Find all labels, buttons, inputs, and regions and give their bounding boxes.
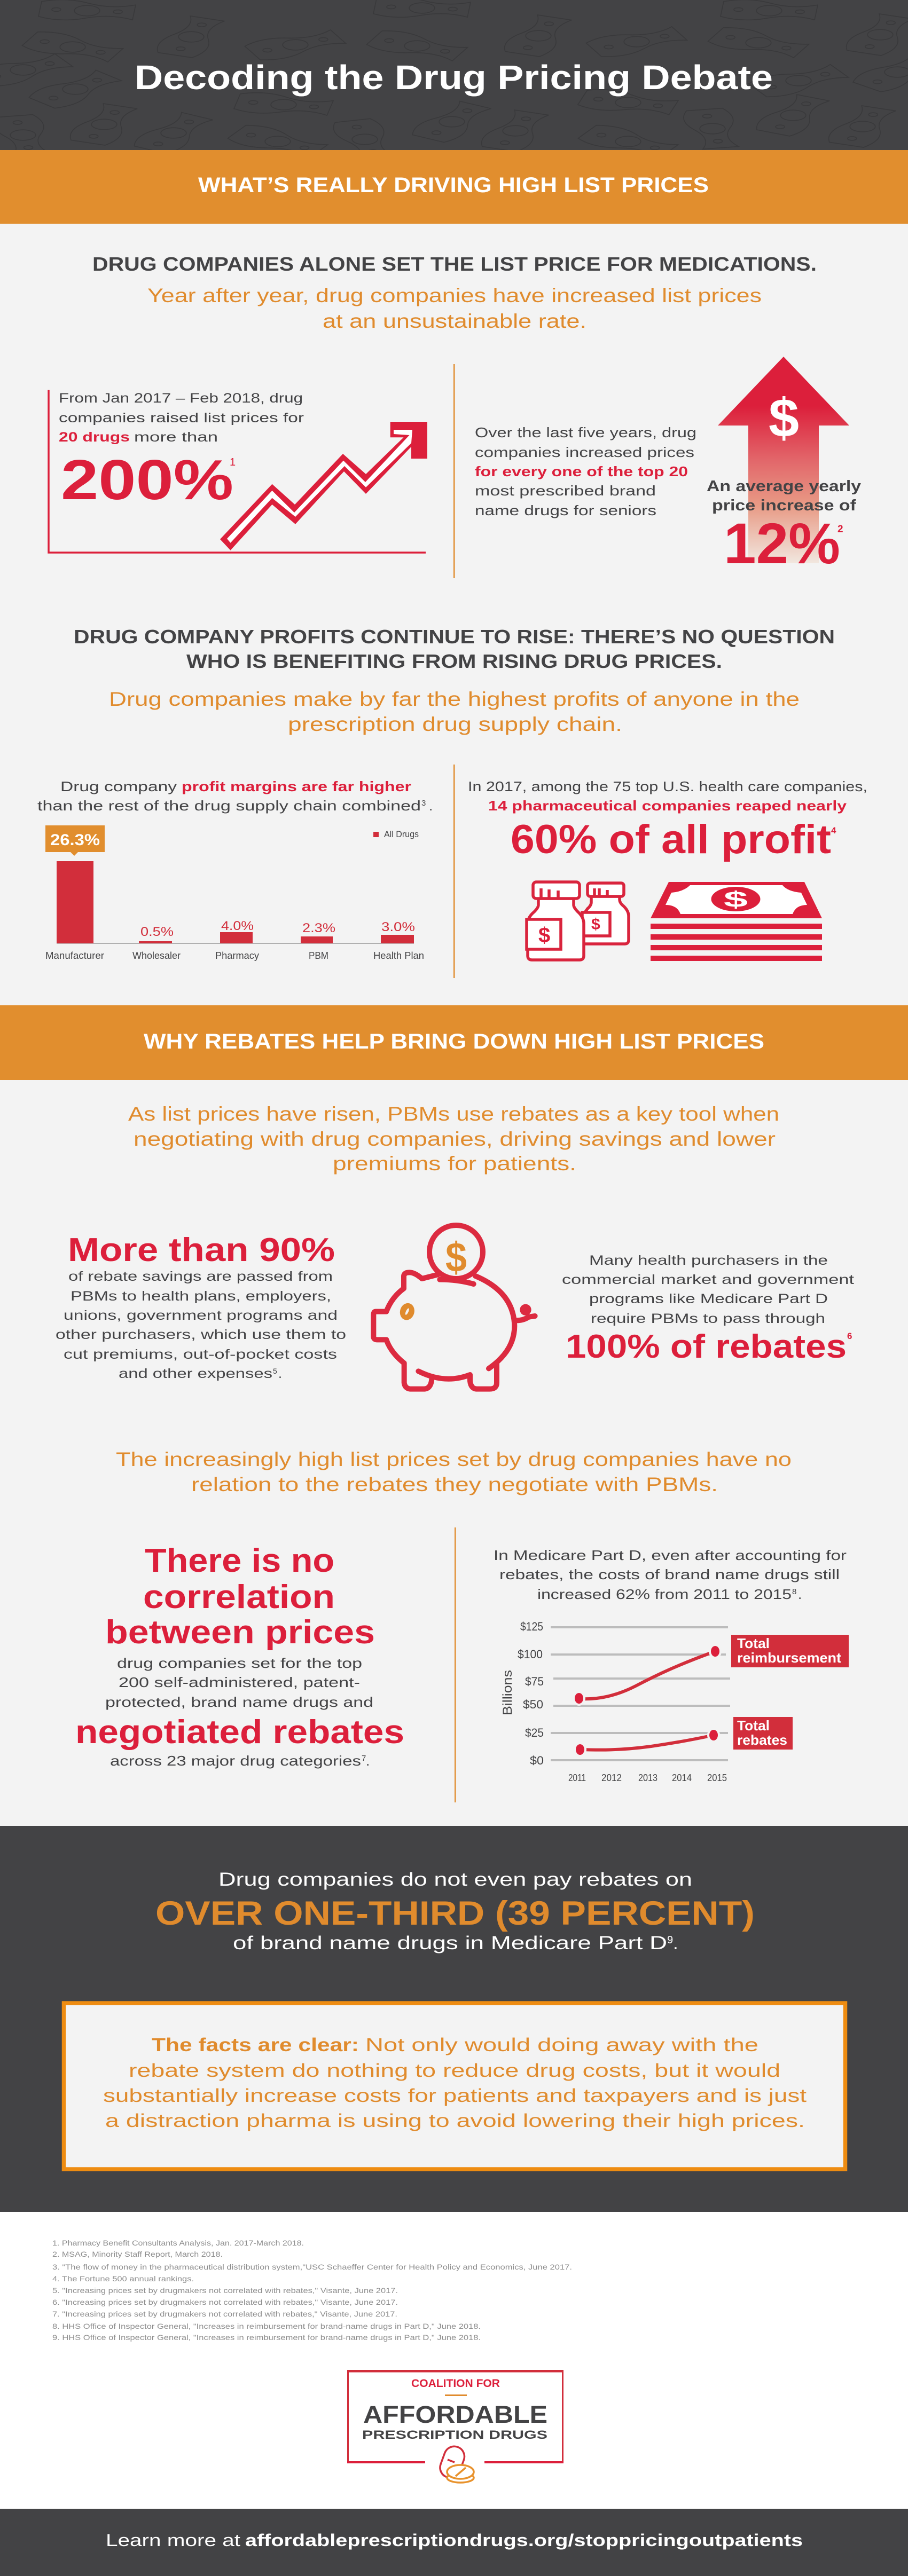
icon: pill bottles: $ <box>591 916 600 933</box>
text: learn more: affordableprescriptiondrugs.org/stoppricingoutpatients <box>245 2531 803 2550</box>
title: Decoding the Drug Pricing Debate <box>135 58 773 97</box>
bar: health plan: 3.0% <box>381 920 415 934</box>
line chart: reimbursement and rebates <box>500 1620 849 1783</box>
label: total rebates <box>733 1717 793 1750</box>
bar: PBM: PBM <box>309 950 328 961</box>
x axis labels: 2015 <box>707 1773 727 1783</box>
text block: no correlation: protected, brand name drugs and <box>105 1694 373 1710</box>
bar: health plan: Health Plan <box>373 950 424 961</box>
subheading: year after year: at an unsustainable rate. <box>323 310 586 332</box>
stat: more than 90 percent: unions, government programs and <box>64 1308 338 1323</box>
divider line <box>453 765 455 978</box>
subheading: year after year <box>147 285 762 332</box>
icon: pill bottles: $ <box>538 924 550 947</box>
stat: more than 90 percent: of rebate savings are passed from <box>68 1269 333 1284</box>
stat: 100 percent of rebates: 6 <box>847 1331 852 1341</box>
callout: the facts are clear: rebate system do nothing to reduce drug costs, but it would <box>129 2060 780 2081</box>
bar: manufacturer: Manufacturer <box>45 950 104 961</box>
x axis labels: 2011 <box>568 1773 586 1783</box>
divider line <box>453 364 455 578</box>
bar: pharmacy <box>215 919 259 961</box>
panel: header <box>0 0 908 161</box>
footnotes: 5. "Increasing prices set by drugmakers not correlated with rebates," Visante, June 2017. <box>52 2286 398 2295</box>
subheading: rebates as key tool: As list prices have risen, PBMs use rebates as a key tool when <box>128 1103 779 1125</box>
text block: no correlation: across 23 major drug categories <box>110 1753 361 1769</box>
label: total rebates: rebates <box>737 1732 787 1748</box>
stat: more than 90 percent: and other expenses <box>119 1366 272 1381</box>
icon: piggy bank with coin: $ <box>445 1234 467 1281</box>
heading: what's really driving high list prices: WHAT’S REALLY DRIVING HIGH LIST PRICES <box>198 174 709 197</box>
text: medicare part D <box>494 1547 847 1602</box>
text: medicare part D: increased 62% from 2011 to 2015 <box>537 1586 792 1602</box>
y axis labels: $0 <box>530 1754 544 1767</box>
panel: section banner 2 <box>0 1005 908 1080</box>
x axis labels: 2013 <box>638 1773 657 1783</box>
callout: the facts are clear <box>64 2003 845 2169</box>
text: profit margins: profit margins are far higher <box>182 778 411 794</box>
stat: more than 90 percent: . <box>278 1366 282 1381</box>
x axis labels <box>568 1773 727 1783</box>
text: medicare part D: rebates, the costs of brand name drugs still <box>499 1566 840 1582</box>
footnotes: 2. MSAG, Minority Staff Report, March 2018. <box>52 2250 223 2258</box>
bar: wholesaler: 0.5% <box>140 925 174 939</box>
heading: drug company profits <box>74 626 835 672</box>
bar: wholesaler <box>132 925 181 961</box>
text: 20 drugs more than: 20 drugs <box>59 430 130 445</box>
heading: drug company profits: DRUG COMPANY PROFITS CONTINUE TO RISE: THERE’S NO QUESTION <box>74 626 835 648</box>
text: top 20 brand name drugs: for every one of the top 20 <box>475 463 688 479</box>
text: over one-third: 9 <box>667 1934 673 1946</box>
text: 14 pharmaceutical companies: In 2017, among the 75 top U.S. health care companies, <box>468 778 867 794</box>
text: top 20 brand name drugs <box>475 424 696 518</box>
text block: no correlation: There is no <box>145 1542 334 1579</box>
label: total rebates: Total <box>737 1718 770 1734</box>
y axis labels: $100 <box>518 1648 543 1661</box>
footnotes: 1. Pharmacy Benefit Consultants Analysis, Jan. 2017-March 2018. <box>52 2239 304 2247</box>
text: over one-third: Drug companies do not even pay rebates on <box>218 1869 692 1890</box>
y axis labels: Billions <box>500 1670 515 1715</box>
text block: no correlation: 200 self-administered, patent- <box>119 1674 360 1690</box>
subheading: no relation: relation to the rebates they negotiate with PBMs. <box>191 1474 718 1495</box>
text block: no correlation: . <box>366 1753 370 1769</box>
footnotes: 9. HHS Office of Inspector General, "Increases in reimbursement for brand-name drugs in Part D," June 2018. <box>52 2333 481 2342</box>
stat: 100 percent of rebates: commercial market and government <box>562 1272 854 1287</box>
text: top 20 brand name drugs: companies increased prices <box>475 444 694 460</box>
icon: price increase arrow with 12 percent stat <box>707 357 861 576</box>
stat: 100 percent of rebates: require PBMs to pass through <box>591 1311 825 1326</box>
y axis labels: $125 <box>520 1620 543 1633</box>
text: learn more: Learn more at <box>106 2531 240 2550</box>
subheading: rebates as key tool: negotiating with drug companies, driving savings and lower <box>134 1128 776 1150</box>
panel: footer call to action <box>0 2509 908 2576</box>
bar: health plan <box>373 920 424 961</box>
subheading: rebates as key tool <box>128 1103 779 1175</box>
text: 20 drugs more than <box>59 391 304 445</box>
label: total reimbursement: reimbursement <box>737 1650 841 1666</box>
text: profit margins: 3 <box>421 799 426 808</box>
chart: 200 percent rising zigzag <box>49 390 427 553</box>
text: medicare part D: . <box>798 1586 802 1602</box>
heading: why rebates help: WHY REBATES HELP BRING DOWN HIGH LIST PRICES <box>144 1030 764 1053</box>
subheading: highest profits: prescription drug supply chain. <box>288 713 622 735</box>
icon: stack of cash: $ <box>724 887 748 912</box>
line: total reimbursement <box>573 1644 722 1706</box>
text: learn more <box>106 2531 803 2550</box>
subheading: no relation <box>116 1448 792 1495</box>
text: profit margins: than the rest of the drug supply chain combined <box>37 798 421 814</box>
text: over one-third <box>155 1869 755 1953</box>
line: total rebates <box>574 1728 720 1757</box>
panel: section banner 1 <box>0 150 908 224</box>
text: 14 pharmaceutical companies: 14 pharmaceutical companies reaped nearly <box>488 798 847 814</box>
icon: price increase arrow with 12 percent stat: 2 <box>837 524 843 535</box>
text: profit margins: . <box>429 798 433 814</box>
icon: price increase arrow with 12 percent stat: price increase of <box>712 497 856 514</box>
callout: the facts are clear: a distraction pharma is using to avoid lowering their high prices. <box>105 2110 805 2131</box>
panel: light background for list price and rebates sections <box>0 224 908 1005</box>
text: over one-third: OVER ONE-THIRD (39 PERCENT) <box>155 1895 755 1932</box>
footnotes: 7. "Increasing prices set by drugmakers not correlated with rebates," Visante, June 2017. <box>52 2310 397 2318</box>
text: medicare part D: In Medicare Part D, even after accounting for <box>494 1547 847 1563</box>
icon: price increase arrow with 12 percent stat: 12% <box>724 511 840 576</box>
panel: dark conclusion <box>0 1826 908 2212</box>
y axis labels: $25 <box>525 1726 544 1739</box>
text block: no correlation <box>75 1542 404 1769</box>
y axis labels: $75 <box>525 1675 544 1688</box>
label: total reimbursement: Total <box>737 1635 770 1651</box>
icon: pills <box>437 2444 474 2483</box>
footnotes: 6. "Increasing prices set by drugmakers not correlated with rebates," Visante, June 2017. <box>52 2298 398 2306</box>
text block: no correlation: negotiated rebates <box>75 1714 404 1751</box>
stat: 100 percent of rebates: 100% of rebates <box>566 1328 847 1365</box>
text: top 20 brand name drugs: name drugs for seniors <box>475 502 656 518</box>
bar: pharmacy: Pharmacy <box>215 950 259 961</box>
callout: the facts are clear: Not only would doing away with the <box>365 2035 758 2055</box>
bar: pharmacy: 4.0% <box>221 919 254 933</box>
icon: pill bottles <box>527 882 629 960</box>
stat: 60 percent of all profit: 4 <box>831 825 836 836</box>
footnotes: 3. "The flow of money in the pharmaceutical distribution system,"USC Schaeffer Center for Health Policy and Economics, June 2017. <box>52 2263 572 2271</box>
text block: no correlation: between prices <box>105 1614 375 1651</box>
text: top 20 brand name drugs: Over the last five years, drug <box>475 424 696 440</box>
bar: manufacturer: 26.3% <box>50 831 100 849</box>
text block: no correlation: drug companies set for the top <box>117 1655 362 1671</box>
panel: light background for rebates content <box>0 1080 908 1826</box>
footnotes: 8. HHS Office of Inspector General, "Increases in reimbursement for brand-name drugs in Part D," June 2018. <box>52 2322 481 2330</box>
logo: coalition for affordable prescription drugs: COALITION FOR <box>411 2377 500 2390</box>
x axis labels: 2014 <box>672 1773 692 1783</box>
stat: more than 90 percent: PBMs to health plans, employers, <box>71 1289 331 1304</box>
text: 20 drugs more than: From Jan 2017 – Feb 2018, drug <box>59 391 303 406</box>
stat: 100 percent of rebates: programs like Medicare Part D <box>589 1291 828 1306</box>
heading: drug companies set list price: DRUG COMPANIES ALONE SET THE LIST PRICE FOR MEDICATIONS. <box>92 253 817 275</box>
bar: PBM: 2.3% <box>302 921 335 935</box>
x axis labels: 2012 <box>601 1773 622 1783</box>
icon: piggy bank with coin <box>373 1225 535 1389</box>
text: 20 drugs more than: more than <box>134 430 218 445</box>
icon: price increase arrow with 12 percent stat: $ <box>769 388 799 448</box>
callout: the facts are clear: substantially increase costs for patients and taxpayers and is just <box>103 2085 807 2106</box>
text: profit margins: Drug company <box>60 778 177 794</box>
stat: 200%: 1 <box>230 456 236 468</box>
text: over one-third: of brand name drugs in Medicare Part D <box>233 1933 667 1953</box>
legend: All Drugs <box>384 829 419 839</box>
bar: PBM <box>301 921 335 961</box>
stat: more than 90 percent <box>56 1232 346 1381</box>
icon: price increase arrow with 12 percent stat: An average yearly <box>707 478 861 495</box>
axes <box>49 390 426 553</box>
bar chart: profit margins <box>45 825 424 961</box>
icon: zigzag arrow <box>220 422 427 550</box>
logo: coalition for affordable prescription drugs: PRESCRIPTION DRUGS <box>362 2428 547 2441</box>
logo: coalition for affordable prescription drugs <box>347 2370 563 2483</box>
footnotes <box>52 2239 572 2342</box>
footnotes: 4. The Fortune 500 annual rankings. <box>52 2274 194 2283</box>
subheading: highest profits: Drug companies make by far the highest profits of anyone in the <box>109 688 800 710</box>
bar: manufacturer <box>45 825 105 961</box>
stat: 200%: 200% <box>61 448 233 511</box>
label: total reimbursement <box>731 1635 849 1667</box>
subheading: year after year: Year after year, drug companies have increased list prices <box>147 285 762 306</box>
stat: more than 90 percent: other purchasers, which use them to <box>56 1327 346 1342</box>
divider line <box>455 1527 456 1802</box>
bar: wholesaler: Wholesaler <box>132 950 181 961</box>
subheading: rebates as key tool: premiums for patients. <box>333 1153 576 1175</box>
text: top 20 brand name drugs: most prescribed brand <box>475 483 656 499</box>
stat: more than 90 percent: More than 90% <box>68 1232 335 1269</box>
stat: 60 percent of all profit: 60% of all profit <box>511 817 831 862</box>
text: medicare part D: 8 <box>792 1587 796 1596</box>
text block: no correlation: 7 <box>362 1754 366 1763</box>
text: 20 drugs more than: companies raised list prices for <box>59 411 304 426</box>
stat: more than 90 percent: 5 <box>273 1367 277 1375</box>
y axis labels: $50 <box>523 1698 543 1711</box>
text: 14 pharmaceutical companies <box>468 778 867 814</box>
subheading: highest profits <box>109 688 800 735</box>
y axis labels <box>500 1620 544 1767</box>
icon: stack of cash <box>651 882 822 961</box>
callout: the facts are clear: The facts are clear: <box>152 2035 359 2055</box>
heading: drug company profits: WHO IS BENEFITING FROM RISING DRUG PRICES. <box>186 650 722 672</box>
stat: 100 percent of rebates: Many health purchasers in the <box>589 1253 828 1268</box>
subheading: no relation: The increasingly high list prices set by drug companies have no <box>116 1448 792 1470</box>
text: profit margins <box>37 778 433 814</box>
stat: more than 90 percent: cut premiums, out-of-pocket costs <box>64 1347 337 1362</box>
logo: coalition for affordable prescription drugs: AFFORDABLE <box>363 2401 547 2428</box>
text: over one-third: . <box>673 1933 678 1953</box>
stat: 100 percent of rebates <box>562 1253 854 1365</box>
text block: no correlation: correlation <box>143 1579 335 1616</box>
